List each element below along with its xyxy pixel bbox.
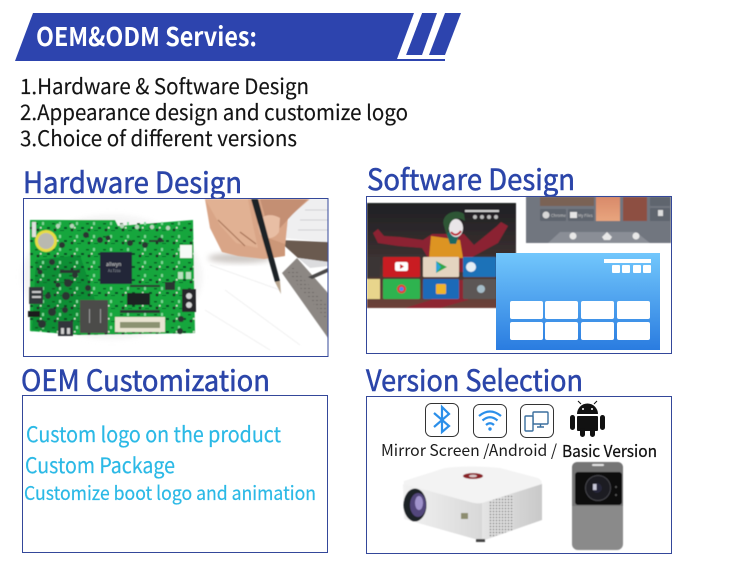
heading: OEM Customization: OEM Customization	[21, 358, 270, 400]
panel: hardware design	[22, 198, 328, 356]
screenshot: grey launcher: My Files	[578, 213, 593, 219]
illustration: green circuit board	[22, 215, 202, 339]
screenshot: grey launcher	[526, 196, 671, 243]
version labels	[381, 437, 657, 462]
illustration: hand drawing with pencil and ruler	[205, 199, 328, 350]
blue launcher placeholder card	[496, 253, 660, 350]
icon: wifi	[474, 404, 506, 438]
panel: software design	[366, 196, 672, 354]
heading: Software Design: Software Design	[367, 157, 575, 199]
list of services: 3.Choice of different versions	[20, 123, 297, 153]
screenshot: launcher with character	[367, 203, 516, 308]
banner: OEM&ODM Servies	[15, 13, 461, 61]
version labels: Mirror Screen /Android /	[381, 437, 558, 461]
version labels: Basic Version	[562, 438, 657, 462]
heading: Version Selection: Version Selection	[366, 358, 583, 400]
illustration: green circuit board: A1.T216	[108, 269, 121, 274]
panel: OEM customization: Custom logo on the product	[26, 419, 281, 449]
heading: Hardware Design: Hardware Design	[23, 160, 242, 202]
illustration: grey portable projector	[572, 462, 623, 550]
list of services	[20, 71, 408, 153]
icon: mirror screen devices	[520, 404, 554, 438]
icon: android robot	[570, 401, 605, 437]
illustration: white projector	[403, 466, 542, 542]
icon: bluetooth	[426, 404, 458, 436]
panel: OEM customization	[22, 396, 328, 552]
screenshot: grey launcher: Chrome	[551, 213, 567, 219]
panel: OEM customization: Customize boot logo and animation	[24, 479, 316, 506]
panel: OEM customization: Custom Package	[25, 450, 175, 480]
list of services: 2.Appearance design and customize logo	[20, 97, 408, 127]
list of services: 1.Hardware & Software Design	[20, 71, 309, 101]
panel: version selection	[366, 396, 672, 554]
banner: OEM&ODM Servies: OEM&ODM Servies:	[36, 17, 257, 54]
illustration: green circuit board: allwyn	[106, 261, 121, 268]
